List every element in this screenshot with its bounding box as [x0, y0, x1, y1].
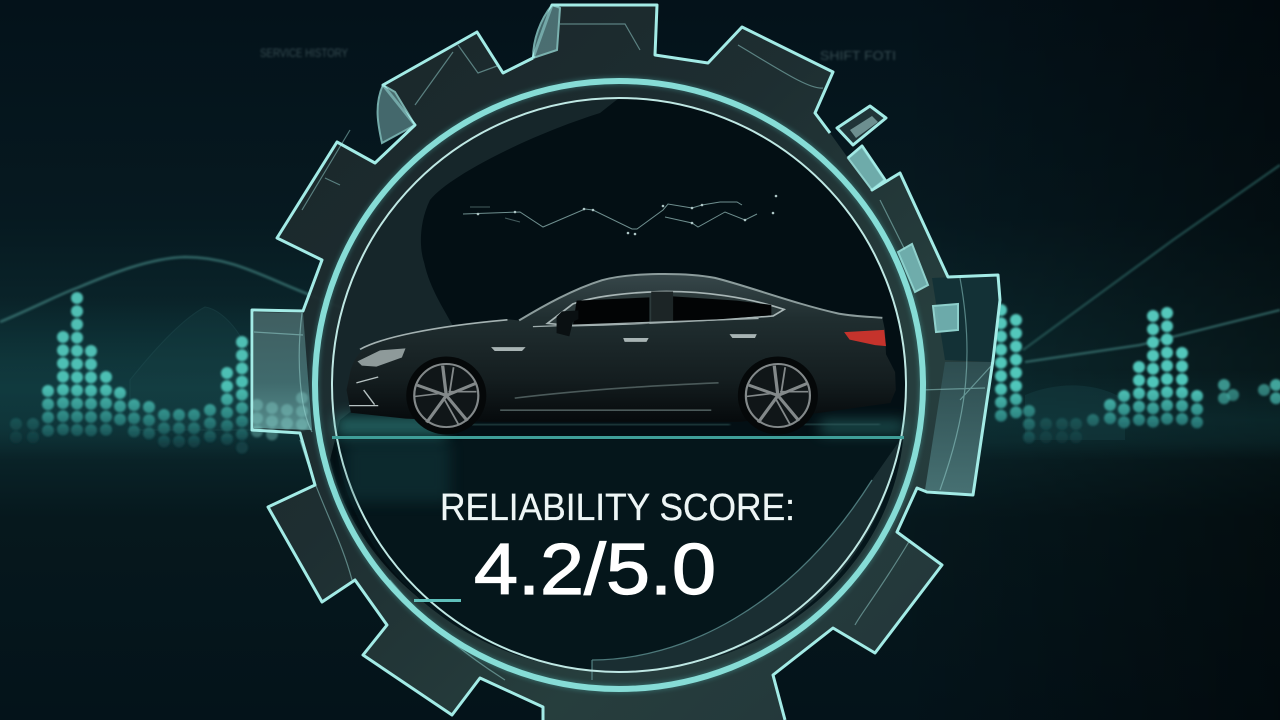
- ring marker blocks: [848, 146, 958, 332]
- right background chart: [1001, 165, 1280, 440]
- light tooth panel right: [925, 362, 992, 494]
- top tooth fold highlights: [378, 5, 560, 143]
- ground glow: [332, 415, 905, 502]
- side marker: small widget: [837, 106, 886, 145]
- score underline: [414, 599, 461, 602]
- lower right inner arc: [592, 480, 872, 680]
- left hill: [130, 307, 260, 430]
- taillight: [844, 330, 886, 346]
- roof highlight: [519, 274, 882, 320]
- gear outline: [252, 5, 1000, 720]
- car: [347, 274, 896, 435]
- right hill: [1025, 385, 1125, 440]
- faint header labels: [260, 46, 896, 63]
- mini line chart: [463, 195, 777, 235]
- reliability score value: 4.2/5.0: [474, 530, 716, 610]
- ring thin inner: [332, 98, 906, 672]
- ring glow: [315, 81, 923, 689]
- gear inner detail lines: [254, 24, 992, 680]
- lower right crescent: [592, 440, 900, 672]
- grille accents: [349, 377, 378, 406]
- ring bright band: [315, 81, 923, 689]
- door handles: [491, 334, 757, 351]
- belt line: [533, 318, 759, 327]
- headlight: [357, 348, 406, 367]
- gear body: [252, 5, 1000, 720]
- right trend line lower: [1025, 310, 1280, 362]
- dots seen through the left tooth: [257, 398, 302, 435]
- mirror: [557, 310, 578, 336]
- light tooth panel left: [254, 312, 312, 430]
- disc dark centre: [330, 98, 905, 672]
- left wave line: [0, 257, 400, 332]
- right trend line upper: [1023, 165, 1280, 350]
- ground line: [332, 436, 904, 439]
- hood highlight: [360, 320, 507, 349]
- rear wheel: [738, 357, 818, 435]
- gear fill: [252, 5, 1000, 720]
- disc lower tone: [335, 440, 903, 672]
- disc base: [332, 98, 906, 672]
- left dot columns: [16, 298, 242, 450]
- ring band: [315, 81, 923, 689]
- front wheel: [406, 357, 486, 435]
- body creases: [500, 383, 719, 410]
- translucent tooth panel at right: [932, 275, 1000, 362]
- left faint label: SERVICE HISTORY: [260, 46, 348, 60]
- car body: [347, 274, 896, 422]
- left background chart: [0, 257, 400, 450]
- reliability score label: RELIABILITY SCORE:: [440, 487, 795, 529]
- windows: [547, 291, 784, 326]
- right faint label: SHIFT FOTI: [820, 48, 896, 63]
- right dot columns: [1001, 310, 1276, 440]
- central disc: [330, 98, 906, 680]
